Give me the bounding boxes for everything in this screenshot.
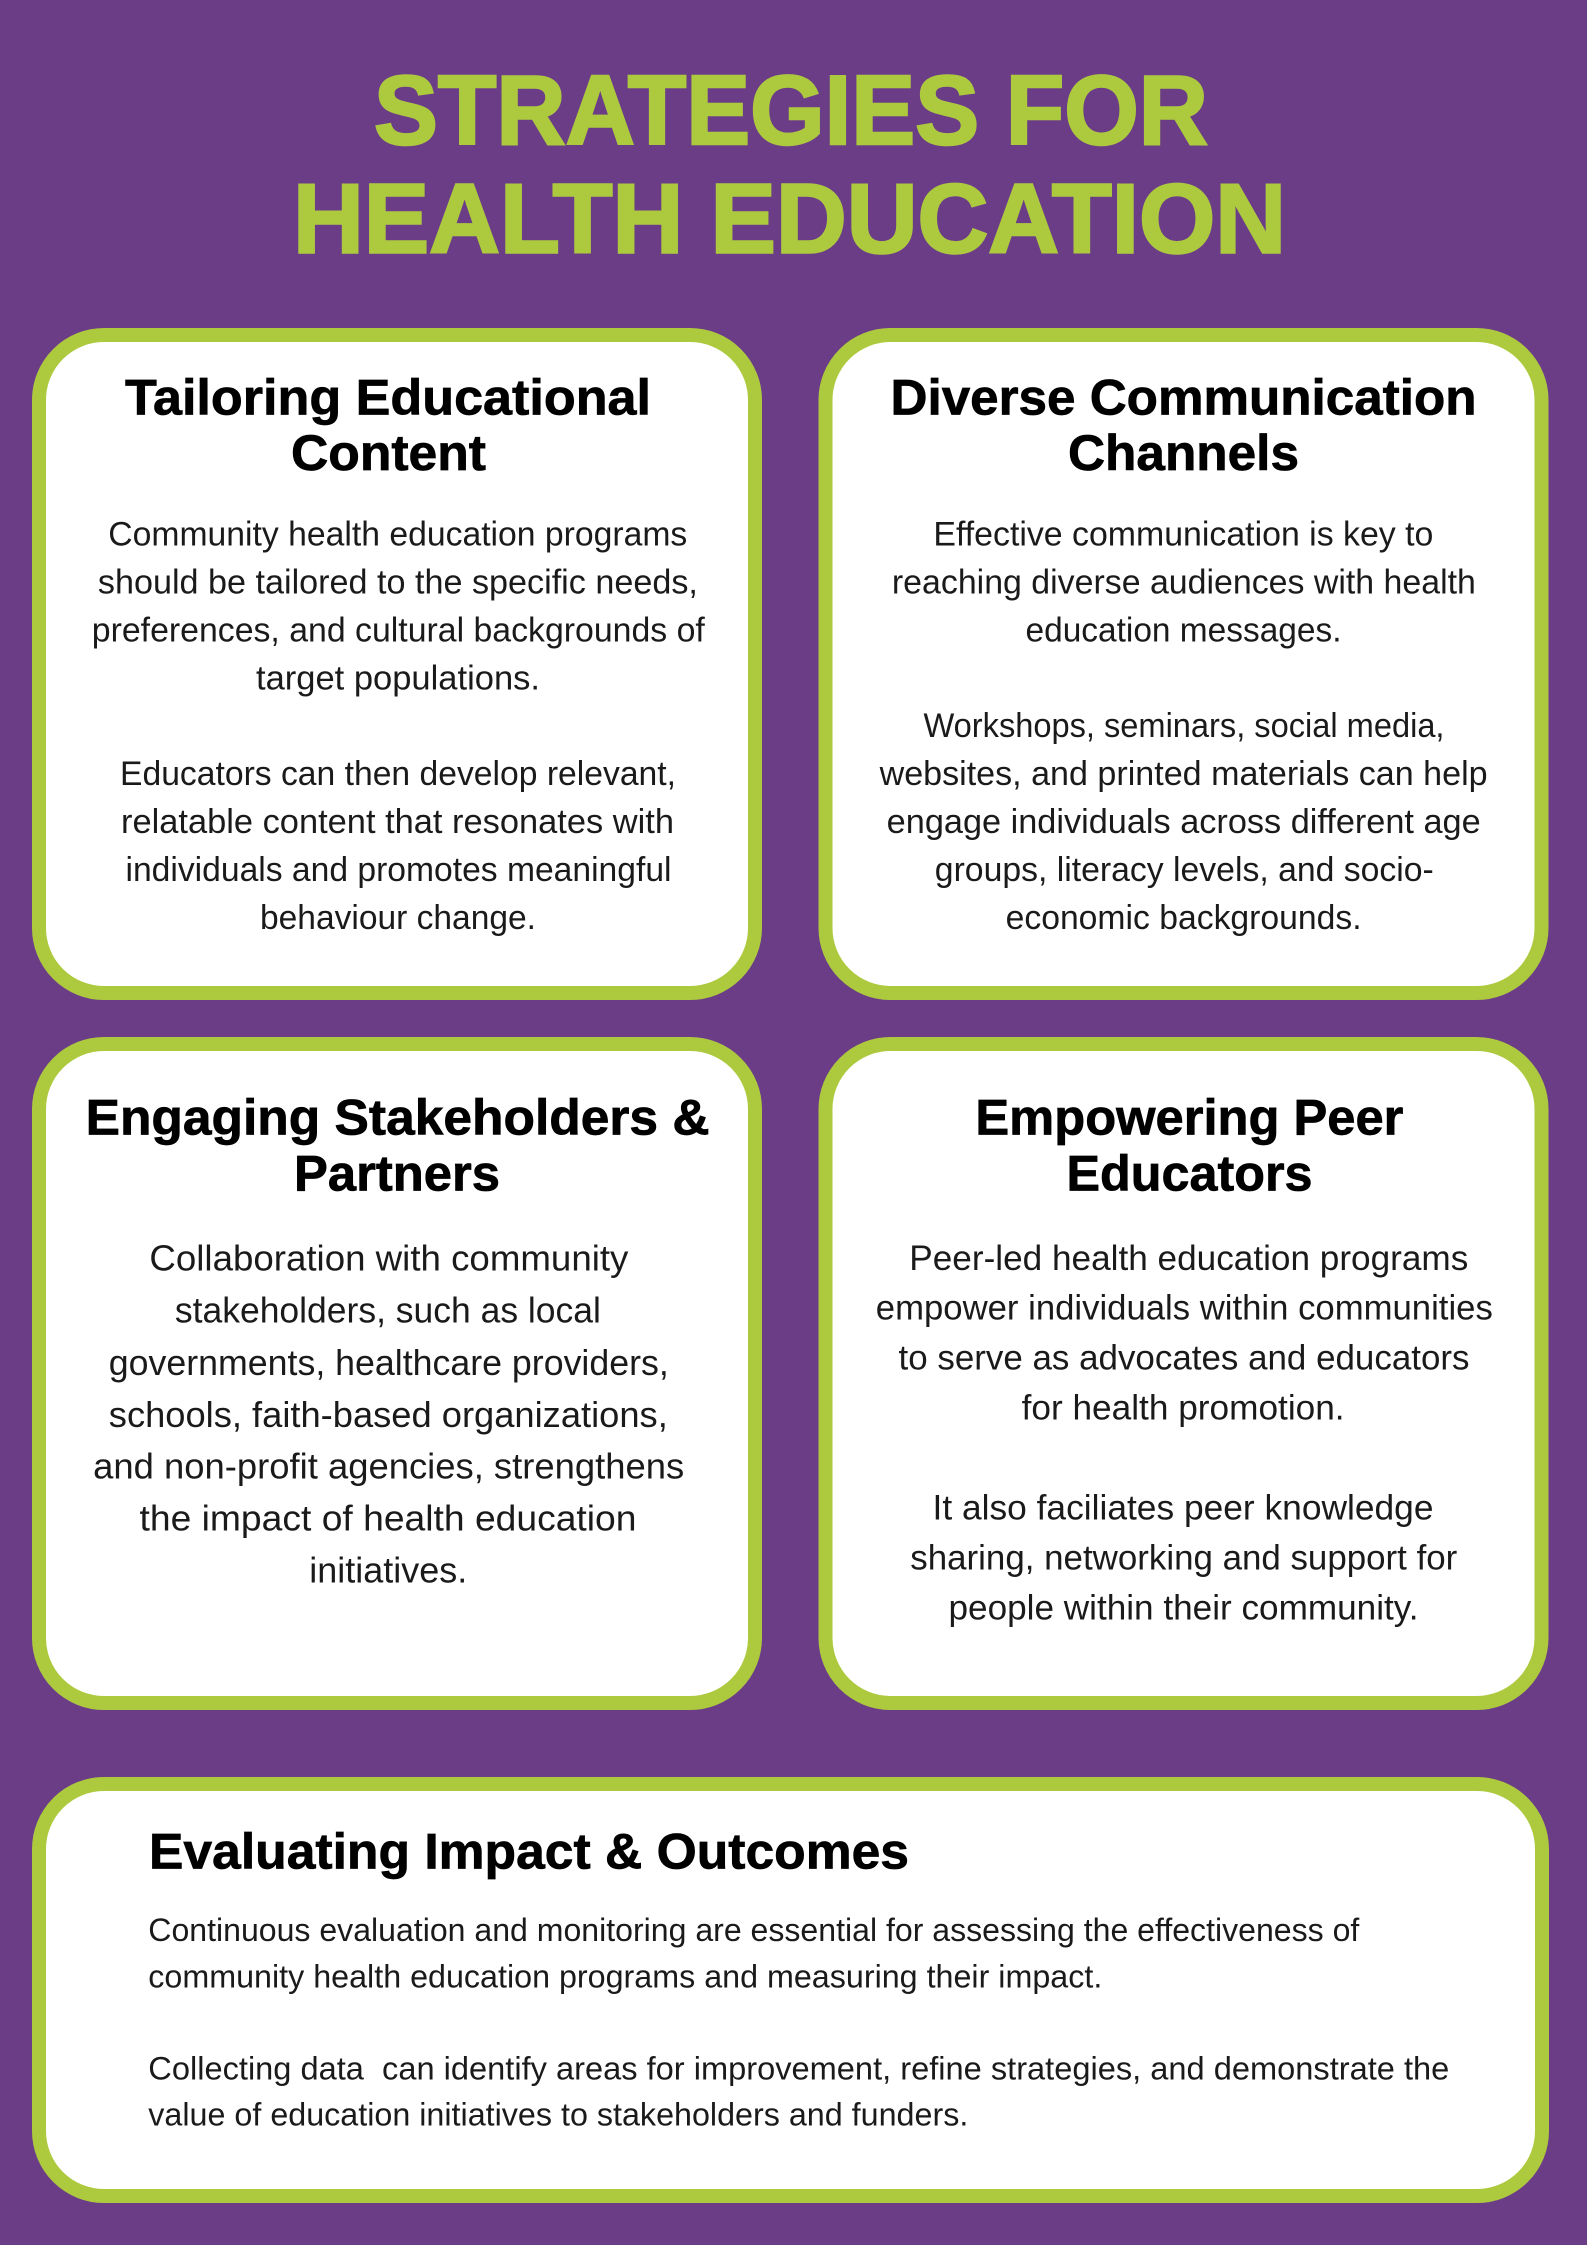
body text: tailoring educational content: Community health education programs: [108, 515, 687, 553]
body text: diverse communication channels: economic backgrounds.: [1006, 899, 1362, 937]
card outline: [39, 1784, 1542, 2196]
title: [293, 55, 1286, 274]
body text: empowering peer educators: It also faciliates peer knowledge: [932, 1488, 1434, 1527]
panel: diverse communication channels: [826, 335, 1542, 993]
body text: evaluating impact and outcomes: community health education programs and measuring their impact.: [148, 1959, 1102, 1995]
body text: empowering peer educators: for health promotion.: [1022, 1389, 1345, 1428]
body text: engaging stakeholders and partners: initiatives.: [309, 1550, 467, 1591]
body text: tailoring educational content: [92, 515, 705, 937]
heading: engaging stakeholders and partners: Partners: [294, 1146, 500, 1202]
card outline: [39, 1044, 755, 1703]
body text: empowering peer educators: [876, 1239, 1493, 1628]
heading: tailoring educational content: [125, 370, 651, 481]
body text: engaging stakeholders and partners: Collaboration with community: [149, 1238, 628, 1279]
body text: engaging stakeholders and partners: the impact of health education: [140, 1498, 636, 1538]
body text: tailoring educational content: should be tailored to the specific needs,: [98, 563, 698, 601]
heading: empowering peer educators: Empowering Peer: [975, 1090, 1403, 1146]
heading: empowering peer educators: [975, 1090, 1403, 1202]
heading: engaging stakeholders and partners: [86, 1090, 710, 1202]
body text: evaluating impact and outcomes: value of education initiatives to stakeholders and funders.: [148, 2097, 968, 2133]
body text: diverse communication channels: engage individuals across different age: [887, 803, 1481, 841]
heading: empowering peer educators: Educators: [1066, 1146, 1312, 1202]
body text: tailoring educational content: behaviour change.: [260, 899, 536, 937]
body text: engaging stakeholders and partners: [93, 1238, 684, 1591]
body text: evaluating impact and outcomes: [148, 1912, 1449, 2133]
body text: diverse communication channels: reaching diverse audiences with health: [892, 563, 1476, 601]
body text: engaging stakeholders and partners: schools, faith-based organizations,: [109, 1394, 668, 1435]
body text: diverse communication channels: Effective communication is key to: [933, 515, 1433, 553]
card outline: [826, 335, 1542, 993]
body text: evaluating impact and outcomes: Continuous evaluation and monitoring are essential for assessing the effectiveness of: [148, 1912, 1359, 1948]
panel: evaluating impact and outcomes: [39, 1784, 1542, 2196]
panel: empowering peer educators: [826, 1044, 1542, 1703]
title: HEALTH EDUCATION: [293, 164, 1286, 274]
body text: empowering peer educators: Peer-led health education programs: [909, 1239, 1468, 1278]
body text: tailoring educational content: individuals and promotes meaningful: [126, 851, 672, 889]
body text: diverse communication channels: Workshops, seminars, social media,: [924, 707, 1444, 745]
body text: tailoring educational content: target populations.: [256, 659, 540, 697]
body text: tailoring educational content: preferences, and cultural backgrounds of: [92, 611, 705, 649]
body text: empowering peer educators: to serve as advocates and educators: [898, 1339, 1470, 1378]
heading: engaging stakeholders and partners: Engaging Stakeholders &: [86, 1090, 710, 1146]
body text: tailoring educational content: relatable content that resonates with: [121, 803, 674, 841]
body text: empowering peer educators: empower individuals within communities: [876, 1288, 1493, 1328]
card outline: [39, 335, 755, 993]
body text: diverse communication channels: education messages.: [1026, 611, 1342, 649]
panel: engaging stakeholders and partners: [39, 1044, 755, 1703]
body text: empowering peer educators: people within their community.: [948, 1589, 1418, 1628]
body text: engaging stakeholders and partners: and non-profit agencies, strengthens: [93, 1446, 684, 1487]
body text: diverse communication channels: groups, literacy levels, and socio-: [935, 851, 1434, 889]
body text: engaging stakeholders and partners: stakeholders, such as local: [175, 1290, 601, 1331]
panel: tailoring educational content: [39, 335, 755, 993]
body text: engaging stakeholders and partners: governments, healthcare providers,: [109, 1342, 669, 1383]
body text: diverse communication channels: websites, and printed materials can help: [879, 755, 1488, 793]
body text: tailoring educational content: Educators can then develop relevant,: [120, 755, 676, 793]
heading: diverse communication channels: Diverse Communication: [890, 370, 1476, 426]
heading: diverse communication channels: [890, 370, 1476, 481]
body text: empowering peer educators: sharing, networking and support for: [910, 1538, 1458, 1578]
card outline: [826, 1044, 1542, 1703]
body text: diverse communication channels: [879, 515, 1488, 937]
heading: tailoring educational content: Content: [291, 425, 486, 481]
body text: evaluating impact and outcomes: Collecting data can identify areas for improvement, refine strategies, and demonstrate the: [148, 2051, 1449, 2087]
heading: diverse communication channels: Channels: [1068, 425, 1299, 481]
title: STRATEGIES FOR: [374, 55, 1208, 165]
heading: tailoring educational content: Tailoring Educational: [125, 370, 651, 426]
heading: evaluating impact and outcomes: Evaluating Impact & Outcomes: [149, 1824, 909, 1880]
